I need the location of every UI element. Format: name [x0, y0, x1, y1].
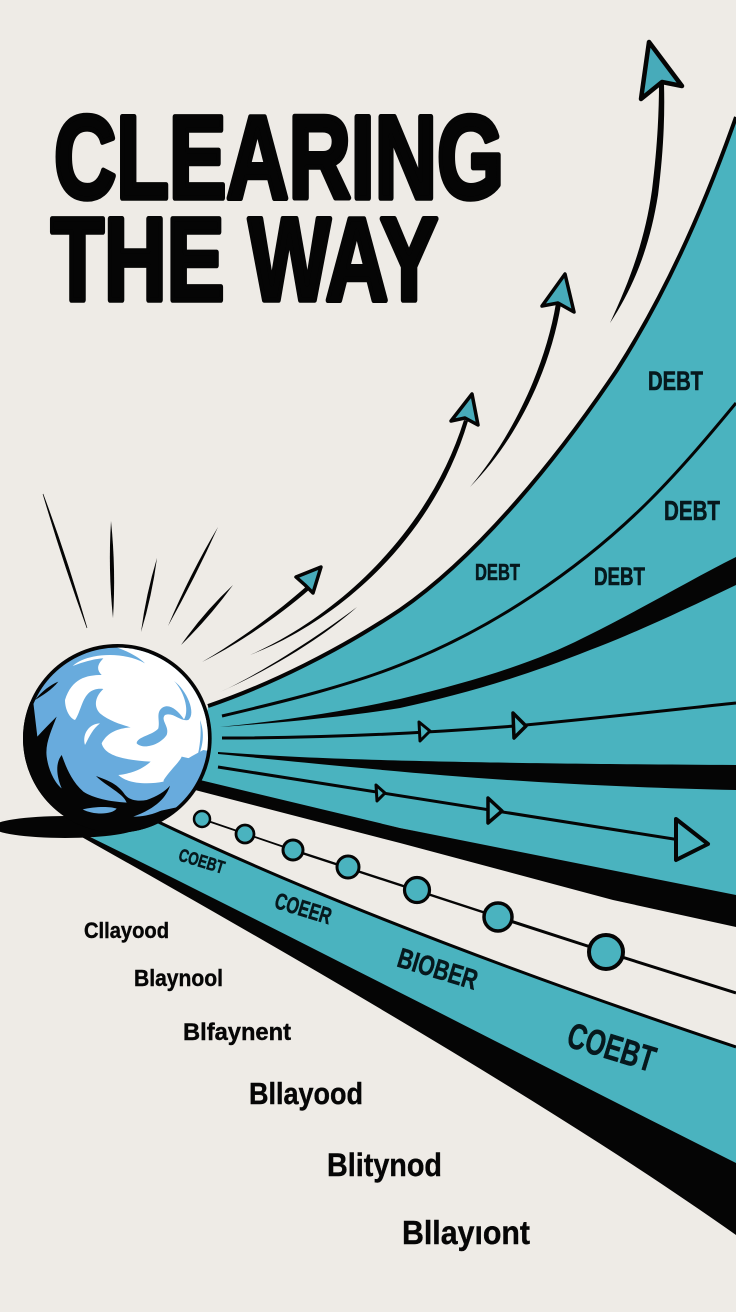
upper teal debt stream [195, 117, 736, 927]
bottom staircase labels: Bllayıont [402, 1214, 530, 1251]
arrow: medium [250, 394, 478, 655]
bottom staircase labels: Blaynool [134, 965, 223, 991]
road labels [176, 845, 661, 1080]
speed line [220, 607, 357, 692]
lower arrow line with triangles [218, 767, 708, 860]
title: CLEARING [54, 92, 504, 224]
arrow: small [202, 567, 321, 662]
lower teal road [80, 818, 736, 1235]
milestone dotted line [194, 811, 736, 993]
bottom staircase labels: Bllayood [249, 1076, 363, 1111]
road labels: COEBT [563, 1014, 661, 1080]
ground shadow [0, 816, 137, 838]
DEBT labels: DEBT [648, 366, 703, 396]
DEBT labels [475, 366, 720, 591]
title [51, 92, 504, 326]
arrow: large [470, 274, 574, 487]
bottom staircase labels: Blfaynent [183, 1019, 291, 1046]
DEBT labels: DEBT [594, 563, 645, 591]
road labels: COEER [272, 887, 335, 929]
road labels: BIOBER [394, 942, 482, 996]
DEBT labels: DEBT [475, 559, 520, 585]
bottom staircase labels: Blitynod [327, 1147, 442, 1183]
burst lines [43, 494, 233, 645]
upper arrow line with triangles [222, 703, 736, 741]
arrow: tallest [610, 42, 682, 323]
bottom staircase labels: Cllayood [84, 918, 169, 943]
sphere [23, 644, 212, 832]
title: THE WAY [51, 194, 438, 326]
road labels: COEBT [176, 845, 227, 878]
bottom staircase labels [84, 918, 530, 1251]
